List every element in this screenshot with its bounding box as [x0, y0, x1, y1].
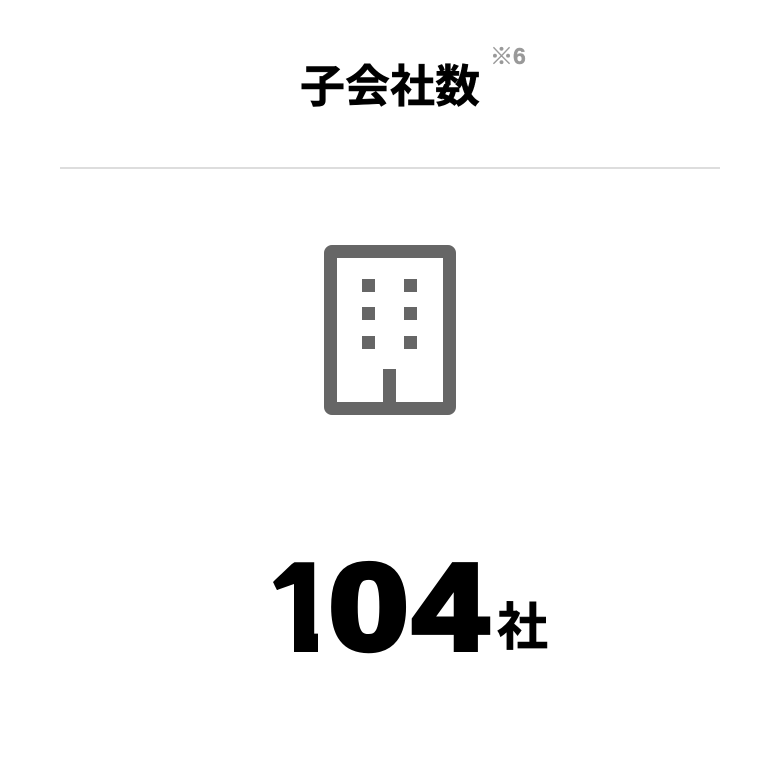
value: 104 companies	[273, 539, 548, 675]
digit 1: 1	[266, 539, 334, 675]
icon: office building	[324, 245, 456, 415]
divider	[60, 167, 720, 169]
digit 0: 0	[329, 539, 408, 675]
digit 4: 4	[413, 539, 488, 675]
footnote marker: ※6	[490, 43, 526, 69]
title: 子会社数	[300, 61, 480, 112]
unit: 社	[497, 599, 548, 656]
